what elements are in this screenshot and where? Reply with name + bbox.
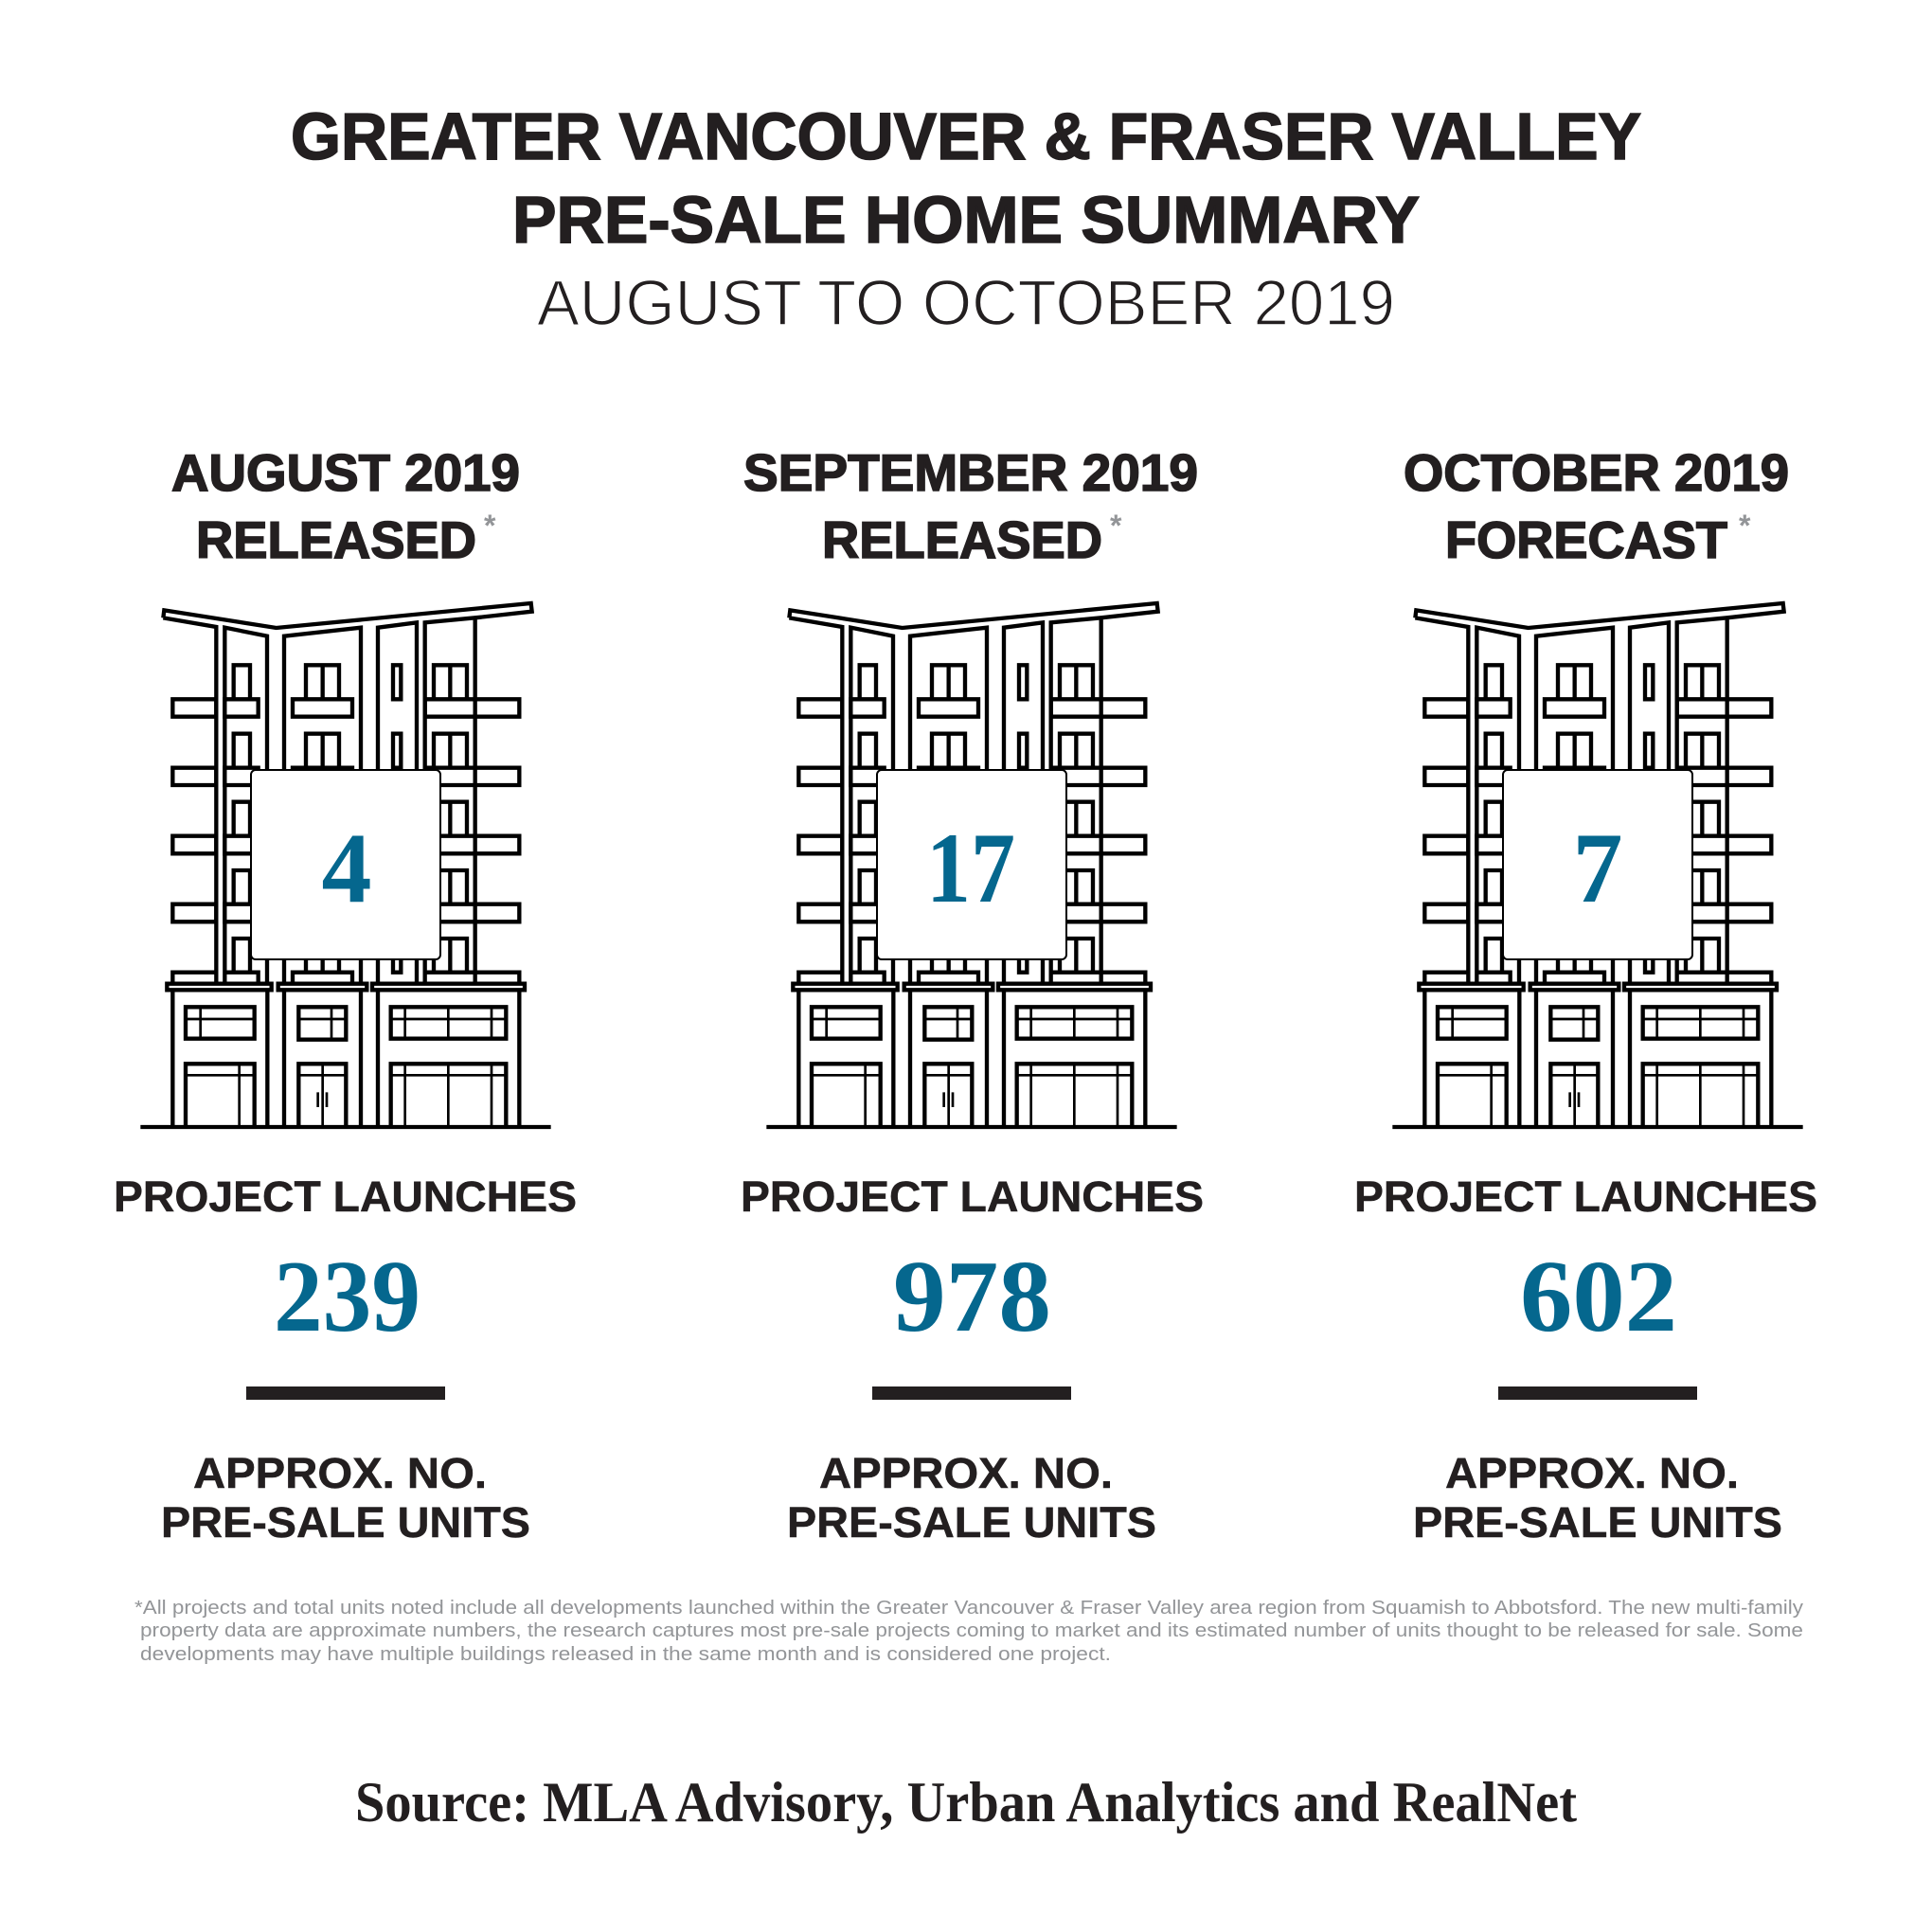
divider bar bbox=[1498, 1386, 1697, 1400]
label: approx units: APPROX. NO. bbox=[819, 1449, 1113, 1497]
heading: August 2019 released: * bbox=[484, 509, 496, 543]
label: approx units: PRE-SALE UNITS bbox=[161, 1498, 530, 1547]
heading: October 2019 forecast: * bbox=[1739, 509, 1751, 543]
label: project launches: PROJECT LAUNCHES bbox=[114, 1172, 577, 1221]
label: approx units: PRE-SALE UNITS bbox=[787, 1498, 1156, 1547]
units number: 239 bbox=[274, 1241, 420, 1353]
heading: September 2019 released: * bbox=[1110, 509, 1122, 543]
heading: September 2019 released bbox=[743, 443, 1198, 569]
title: GREATER VANCOUVER & FRASER VALLEY bbox=[291, 99, 1641, 173]
label: approx units bbox=[787, 1449, 1156, 1547]
heading: September 2019 released: SEPTEMBER 2019 bbox=[743, 443, 1198, 502]
heading: August 2019 released: RELEASED bbox=[196, 510, 476, 569]
heading: October 2019 forecast: OCTOBER 2019 bbox=[1404, 443, 1789, 502]
icon: building bbox=[1392, 603, 1803, 1127]
project count card: 7 bbox=[1572, 813, 1623, 923]
divider bar bbox=[872, 1386, 1071, 1400]
label: approx units: APPROX. NO. bbox=[193, 1449, 487, 1497]
project count card bbox=[251, 770, 440, 959]
label: project launches: PROJECT LAUNCHES bbox=[1354, 1172, 1817, 1221]
panel: October 2019 bbox=[1354, 443, 1817, 1547]
heading: August 2019 released bbox=[171, 443, 520, 569]
project count card bbox=[1503, 770, 1692, 959]
heading: August 2019 released: AUGUST 2019 bbox=[171, 443, 520, 502]
panel: August 2019 bbox=[114, 443, 577, 1547]
heading: September 2019 released: RELEASED bbox=[822, 510, 1102, 569]
icon: building bbox=[140, 603, 551, 1127]
heading: October 2019 forecast: FORECAST bbox=[1445, 510, 1727, 569]
label: approx units bbox=[161, 1449, 530, 1547]
units number: 978 bbox=[893, 1241, 1051, 1353]
title: PRE-SALE HOME SUMMARY bbox=[512, 183, 1420, 257]
project count card: 4 bbox=[322, 813, 371, 923]
label: approx units: APPROX. NO. bbox=[1445, 1449, 1739, 1497]
label: approx units bbox=[1413, 1449, 1782, 1547]
heading: October 2019 forecast bbox=[1404, 443, 1789, 569]
panel: September 2019 bbox=[741, 443, 1204, 1547]
footnote: developments may have multiple buildings released in the same month and is considered one project. bbox=[140, 1644, 1111, 1665]
label: approx units: PRE-SALE UNITS bbox=[1413, 1498, 1782, 1547]
footnote: *All projects and total units noted include all developments launched within the Greater Vancouver & Fraser Valley area region from Squamish to Abbotsford. The new multi-family bbox=[134, 1598, 1803, 1619]
units number: 602 bbox=[1520, 1241, 1677, 1353]
footnote: property data are approximate numbers, the research captures most pre-sale projects coming to market and its estimated number of units thought to be released for sale. Some bbox=[140, 1620, 1803, 1641]
divider bar bbox=[246, 1386, 445, 1400]
title bbox=[291, 99, 1641, 339]
icon: building bbox=[766, 603, 1177, 1127]
label: project launches: PROJECT LAUNCHES bbox=[741, 1172, 1204, 1221]
footnote bbox=[134, 1598, 1803, 1665]
project count card bbox=[877, 770, 1066, 959]
source line: Source: MLA Advisory, Urban Analytics and RealNet bbox=[355, 1771, 1577, 1834]
title: AUGUST TO OCTOBER 2019 bbox=[537, 267, 1395, 339]
project count card: 17 bbox=[926, 813, 1015, 923]
